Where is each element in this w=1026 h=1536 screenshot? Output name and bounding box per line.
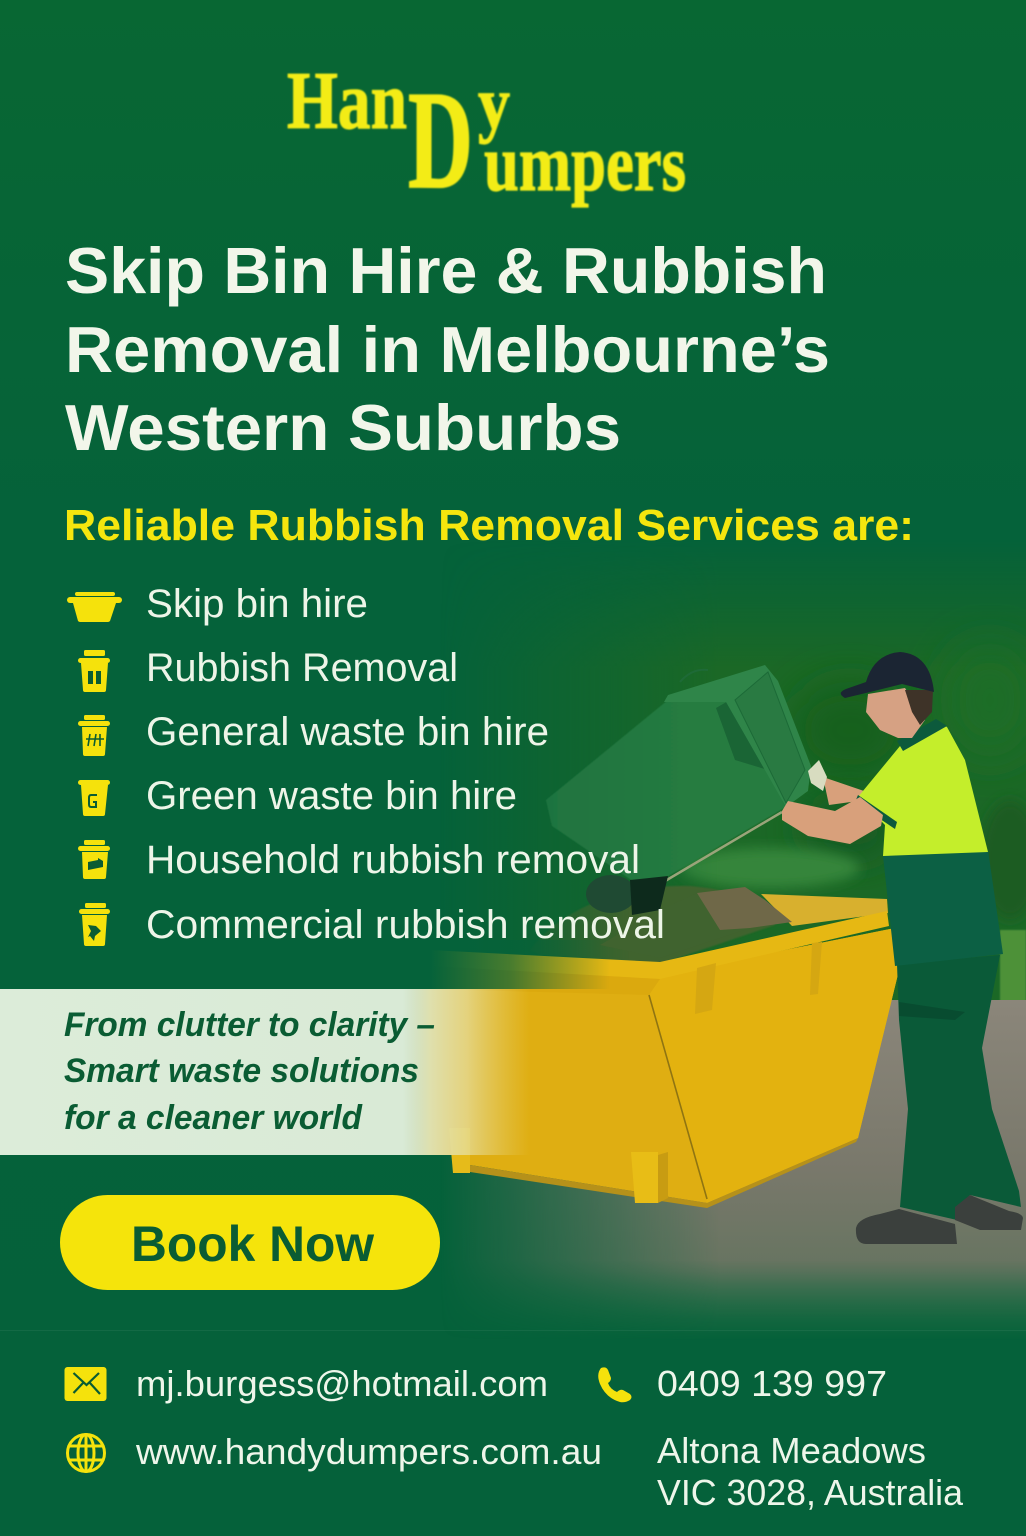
tagline band: for a cleaner world <box>64 1099 363 1137</box>
logo: D <box>408 63 473 218</box>
address <box>657 1430 964 1513</box>
worker <box>782 652 1023 1244</box>
service: rubbish removal: Rubbish Removal <box>146 646 458 690</box>
service: commercial rubbish removal: Commercial rubbish removal <box>146 903 665 947</box>
icon: globe <box>68 1434 104 1472</box>
photo: worker tipping green bin into yellow skip <box>400 540 1026 1340</box>
icon: commercial rubbish bin <box>79 903 110 946</box>
head <box>866 688 925 738</box>
icon: phone <box>598 1367 632 1402</box>
wheel <box>586 875 636 913</box>
title <box>65 234 830 464</box>
road <box>462 1000 1026 1327</box>
services list <box>67 582 665 947</box>
email: mj.burgess@hotmail.com <box>136 1363 548 1404</box>
icon: green waste bin <box>78 780 110 816</box>
website: www.handydumpers.com.au <box>135 1431 602 1472</box>
foliage backdrop <box>549 588 1026 1000</box>
title: Skip Bin Hire & Rubbish <box>65 234 827 307</box>
phone number: 0409 139 997 <box>657 1363 887 1404</box>
tagline band: From clutter to clarity – <box>64 1006 435 1044</box>
icon: household rubbish bin <box>78 840 110 879</box>
tagline band: Smart waste solutions <box>64 1052 419 1090</box>
shirt upper <box>858 722 988 856</box>
icon: skip bin <box>67 592 122 622</box>
title: Removal in Melbourne’s <box>65 313 830 386</box>
title: Western Suburbs <box>65 391 621 464</box>
service: skip bin hire: Skip bin hire <box>146 582 368 626</box>
address: Altona Meadows <box>657 1430 926 1471</box>
address: VIC 3028, Australia <box>657 1472 964 1513</box>
soil and mound in front of the wheel <box>600 887 792 958</box>
icon: envelope <box>64 1367 106 1401</box>
service: green waste bin hire: Green waste bin hire <box>146 774 517 818</box>
yellow skip bin <box>400 894 900 1208</box>
tagline band <box>0 989 530 1155</box>
icon: general waste bin <box>78 715 110 756</box>
subheading: Reliable Rubbish Removal Services are: <box>64 501 914 550</box>
trousers <box>897 955 1021 1220</box>
shirt lower <box>883 850 1003 966</box>
button: book now: Book Now <box>131 1216 374 1272</box>
near arm <box>782 797 883 844</box>
icon: rubbish removal bin <box>78 650 110 692</box>
contact footer <box>64 1363 964 1513</box>
logo: Han <box>287 55 407 146</box>
logo: y <box>478 63 510 145</box>
cap <box>841 652 934 698</box>
button: book now <box>60 1195 440 1290</box>
logo <box>287 55 686 218</box>
green waste mound <box>530 886 775 964</box>
far arm <box>823 777 864 805</box>
glove <box>808 760 827 791</box>
boots <box>856 1209 957 1244</box>
service: general waste bin hire: General waste bin hire <box>146 710 549 754</box>
service: household rubbish removal: Household rubbish removal <box>146 838 640 882</box>
logo: umpers <box>484 120 686 208</box>
green wheelie bin <box>546 665 811 915</box>
rim fade <box>400 940 610 989</box>
